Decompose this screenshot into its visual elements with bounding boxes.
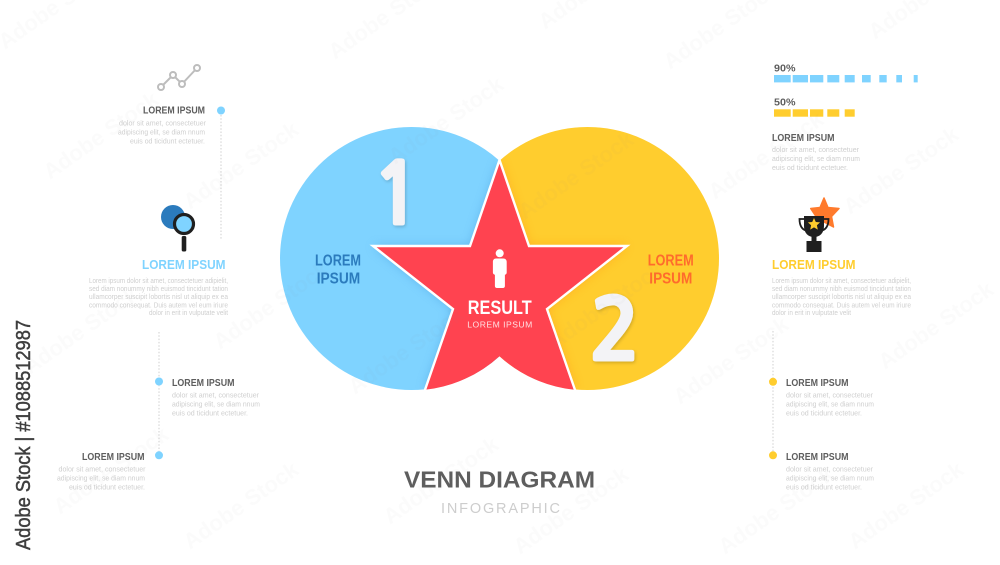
watermark: Adobe Stock — [714, 461, 839, 559]
watermark: Adobe Stock — [669, 311, 794, 409]
text block: left section: dolor in erit in vulputate velit — [149, 308, 229, 317]
watermark: Adobe Stock — [179, 456, 304, 554]
progress bar: 90% — [774, 63, 918, 82]
text block: left section: sed diam nonummy nibh euismod tincidunt tation — [89, 284, 228, 293]
label: circle 1: IPSUM — [317, 270, 360, 287]
circle 1: blue — [280, 127, 500, 390]
text block: right section: sed diam nonummy nibh euismod tincidunt tation — [772, 284, 911, 293]
text block: top left: adipiscing elit, se diam nnum — [118, 128, 205, 136]
text block: left section — [89, 257, 229, 317]
text block: lower right 1: dolor sit amet, consectetuer — [786, 391, 873, 400]
text block: right section: Lorem ipsum dolor sit amet, consectetuer adipielit, — [772, 276, 911, 285]
text block: top right: euis od ticidunt ectetuer. — [772, 163, 848, 172]
circle 2: yellow — [500, 127, 719, 390]
progress bar: 50% — [774, 98, 855, 117]
progress bar: 50%: 50% — [774, 98, 796, 109]
text block: lower left 2: adipiscing elit, se diam nnum — [57, 474, 145, 483]
watermark: Adobe Stock — [344, 301, 469, 399]
text block: lower left 1: euis od ticidunt ectetuer. — [172, 409, 248, 418]
subtitle: INFOGRAPHIC — [441, 501, 560, 517]
text block: lower right 2: LOREM IPSUM — [786, 452, 848, 463]
text block: lower left 1 — [172, 378, 260, 418]
text block: right section — [772, 257, 912, 317]
watermark: Adobe Stock — [844, 456, 969, 554]
watermark: Adobe Stock — [39, 86, 164, 184]
watermark: Adobe Stock — [514, 126, 639, 224]
text block: lower right 2: euis od ticidunt ectetuer. — [786, 483, 862, 492]
label: circle 2: LOREM — [648, 252, 694, 269]
text block: lower right 2: dolor sit amet, consectetuer — [786, 465, 873, 474]
text block: lower left 1: LOREM IPSUM — [172, 378, 234, 389]
text block: lower left 2: euis od ticidunt ectetuer. — [69, 483, 145, 492]
text block: right section: dolor in erit in vulputate velit — [772, 308, 852, 317]
result heading: RESULT — [468, 298, 532, 319]
icon: line chart — [158, 65, 200, 90]
icon: magnifier — [161, 205, 194, 252]
watermark: Adobe Stock — [544, 256, 669, 354]
text block: lower left 1: adipiscing elit, se diam nnum — [172, 400, 260, 409]
watermark: Adobe Stock — [19, 281, 144, 379]
progress bar: 90%: 90% — [774, 63, 796, 74]
title: VENN DIAGRAM — [404, 466, 595, 492]
watermark: Adobe Stock — [49, 421, 174, 519]
watermark: Adobe Stock — [704, 106, 829, 204]
watermark: Adobe Stock — [839, 121, 964, 219]
text block: lower right 1: LOREM IPSUM — [786, 378, 848, 389]
label: circle 1: LOREM — [315, 252, 361, 269]
venn diagram — [280, 127, 719, 390]
text block: top left: LOREM IPSUM — [143, 106, 205, 116]
text block: top left — [118, 106, 206, 146]
text block: right section: ullamcorper suscipit lobortis nisl ut aliquip ex ea — [772, 292, 912, 301]
text block: top right: adipiscing elit, se diam nnum — [772, 154, 860, 163]
text block: lower left 2 — [57, 452, 146, 492]
watermark: Adobe Stock — [379, 431, 504, 529]
text block: top right: LOREM IPSUM — [772, 133, 834, 144]
timeline: bottom left — [155, 332, 163, 459]
text block: top left: dolor sit amet, consectetuer — [119, 118, 206, 128]
text block: lower right 1: adipiscing elit, se diam nnum — [786, 400, 874, 409]
result subheading: LOREM IPSUM — [467, 319, 532, 329]
icon: person — [493, 249, 507, 288]
star outline — [373, 160, 627, 390]
text block: top right — [772, 133, 860, 172]
star: result — [373, 160, 627, 390]
text block: right section: commodo consequat. Duis autem vel eum iriure — [772, 300, 911, 310]
text block: lower right 2 — [786, 452, 874, 492]
vertical stock caption: Adobe Stock | #1088512987 — [13, 320, 35, 550]
text block: lower left 2: LOREM IPSUM — [82, 452, 144, 463]
text block: right section: LOREM IPSUM — [772, 257, 856, 272]
text block: left section: LOREM IPSUM — [142, 257, 226, 272]
text block: top right: dolor sit amet, consectetuer — [772, 145, 859, 154]
text block: lower right 1: euis od ticidunt ectetuer. — [786, 409, 862, 418]
text block: left section: ullamcorper suscipit lobortis nisl ut aliquip ex ea — [89, 292, 229, 301]
text block: top left: euis od ticidunt ectetuer. — [130, 136, 205, 146]
watermark: Adobe Stock — [384, 71, 509, 169]
text block: lower left 1: dolor sit amet, consectetuer — [172, 391, 259, 400]
watermark: Adobe Stock — [179, 116, 304, 214]
text block: lower left 2: dolor sit amet, consectetuer — [58, 465, 146, 474]
timeline: top left — [217, 106, 225, 240]
label: circle 2: IPSUM — [649, 270, 692, 287]
watermark: Adobe Stock — [509, 461, 634, 559]
text block: lower right 2: adipiscing elit, se diam nnum — [786, 474, 874, 483]
text block: lower right 1 — [786, 378, 874, 418]
text block: left section: commodo consequat. Duis autem vel eum iriure — [89, 300, 228, 310]
timeline: bottom right — [769, 331, 777, 459]
icon: trophy with star — [800, 198, 839, 252]
watermark: Adobe Stock — [874, 276, 999, 374]
watermark: Adobe Stock — [209, 256, 334, 354]
text block: left section: Lorem ipsum dolor sit amet, consectetuer adipielit, — [89, 276, 228, 285]
number 2: 2 — [590, 288, 640, 372]
number 1: 1 — [372, 153, 422, 237]
